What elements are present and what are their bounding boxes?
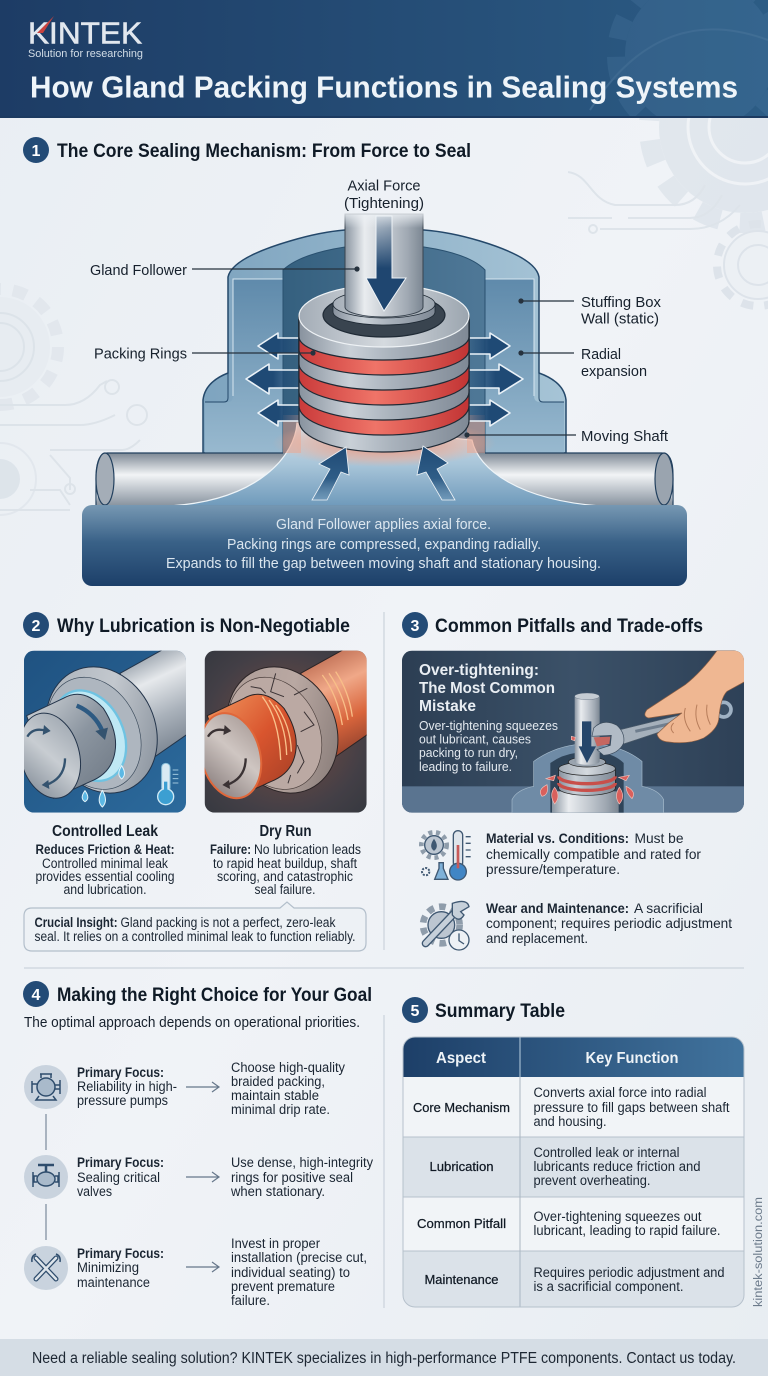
- label: Axial Force: (Tightening): [344, 195, 424, 212]
- card text: dry run: Dry Run: [260, 823, 312, 840]
- info band: Packing rings are compressed, expanding radially.: [227, 536, 541, 553]
- panel: over-tightening illustration: Over-tightening squeezes: [419, 719, 558, 733]
- section 5 heading: Summary Table: [435, 1001, 565, 1022]
- arrow: axial force: [366, 216, 406, 311]
- vertical website label: kintek-solution.com: [753, 1197, 765, 1307]
- card text: dry run: scoring, and catastrophic: [217, 869, 353, 884]
- panel: sealing mechanism diagram: [82, 178, 687, 586]
- row: core mechanism: and housing.: [534, 1114, 606, 1129]
- choice row: maintenance: Primary Focus:: [77, 1246, 164, 1261]
- card text: controlled leak: Reduces Friction & Heat:: [36, 842, 174, 857]
- choice row: maintenance: prevent premature: [231, 1279, 335, 1294]
- text: wear and maintenance: and replacement.: [486, 930, 588, 946]
- panel: over-tightening illustration: The Most Common: [419, 680, 555, 697]
- label: Radial expansion: expansion: [581, 363, 647, 380]
- label: Radial expansion: [518, 346, 647, 380]
- housing: stuffing box: [203, 230, 566, 453]
- section 3 heading: Common Pitfalls and Trade-offs: [435, 616, 703, 637]
- horizontal moving shaft: [96, 423, 673, 506]
- label: Stuffing Box Wall: [518, 294, 661, 328]
- row: core mechanism: Core Mechanism: [413, 1100, 510, 1115]
- label: Stuffing Box Wall: Stuffing Box: [581, 294, 661, 311]
- choice row: maintenance: Minimizing: [77, 1260, 139, 1275]
- info band: [82, 505, 687, 586]
- row: maintenance: [424, 1265, 724, 1294]
- card text: controlled leak: [36, 823, 174, 897]
- background decoration: gears and circuit lines: [0, 31, 768, 515]
- panel: dry run illustration: [204, 650, 367, 813]
- section 5 heading: 5: [411, 1003, 420, 1020]
- text: wear and maintenance: component; requires periodic adjustment: [486, 915, 732, 931]
- row: common pitfall: [417, 1209, 720, 1238]
- choice row: pumps: minimal drip rate.: [231, 1102, 330, 1117]
- panel: over-tightening illustration: [402, 651, 745, 813]
- summary table: Key Function: [586, 1050, 678, 1067]
- icon: material and temperature: [421, 831, 471, 880]
- text: wear and maintenance: Wear and Maintenance:: [486, 900, 629, 916]
- card text: dry run: Failure:: [210, 842, 251, 857]
- info band: Gland Follower applies axial force.: [276, 516, 491, 533]
- row: core mechanism: [413, 1085, 730, 1129]
- icon: pump: [24, 1065, 68, 1109]
- card text: controlled leak: and lubrication.: [64, 882, 146, 897]
- row: lubrication: Controlled leak or internal: [534, 1145, 680, 1160]
- panel: over-tightening illustration: leading to failure.: [419, 760, 512, 774]
- label: Stuffing Box Wall: Wall (static): [581, 310, 659, 328]
- text: material vs conditions: Must be: [634, 830, 684, 846]
- text: material vs conditions: pressure/temperature.: [486, 861, 620, 877]
- choice row: maintenance: maintenance: [77, 1275, 150, 1290]
- title: How Gland Packing Functions in Sealing Systems: [30, 70, 738, 104]
- label: Moving Shaft: Moving Shaft: [581, 428, 669, 445]
- choice row: pumps: pressure pumps: [77, 1093, 168, 1108]
- choice row: maintenance: failure.: [231, 1293, 270, 1308]
- text: material vs conditions: Material vs. Conditions:: [486, 830, 629, 846]
- label: Axial Force: Axial Force: [348, 178, 420, 194]
- section 2 heading: [23, 612, 350, 638]
- row: maintenance: Requires periodic adjustment and: [534, 1265, 724, 1280]
- summary table: Aspect: [436, 1050, 487, 1067]
- summary table: [403, 1037, 744, 1307]
- row: lubrication: prevent overheating.: [534, 1173, 650, 1188]
- text: material vs conditions: chemically compatible and rated for: [486, 846, 701, 862]
- label: Gland Follower: Gland Follower: [90, 262, 187, 279]
- choice row: pumps: Choose high-quality: [231, 1060, 345, 1075]
- icon: valve: [24, 1155, 68, 1199]
- choice row: maintenance: [24, 1236, 367, 1308]
- text: wear and maintenance: A sacrificial: [634, 900, 703, 916]
- card text: dry run: seal failure.: [254, 882, 316, 897]
- row: lubrication: [430, 1145, 700, 1188]
- card text: dry run: No lubrication leads: [254, 842, 361, 857]
- row: maintenance: Maintenance: [424, 1272, 498, 1287]
- label: Packing Rings: [94, 346, 316, 362]
- section 2 heading: 2: [32, 618, 41, 635]
- icon: crossed wrenches: [24, 1246, 68, 1290]
- row: common pitfall: Common Pitfall: [417, 1216, 506, 1231]
- choice row: valves: Primary Focus:: [77, 1155, 164, 1170]
- callout: crucial insight: Gland packing is not a perfect, zero-leak: [120, 915, 336, 930]
- label: Axial Force: [344, 178, 424, 212]
- choice row: pumps: Primary Focus:: [77, 1065, 164, 1080]
- section 4 heading: Making the Right Choice for Your Goal: [57, 985, 372, 1006]
- choice row: maintenance: Invest in proper: [231, 1236, 320, 1251]
- section 1 heading: 1: [32, 143, 41, 160]
- row: core mechanism: pressure to fill gaps between shaft: [534, 1100, 730, 1115]
- choice row: maintenance: installation (precise cut,: [231, 1250, 367, 1265]
- label: Moving Shaft: [464, 428, 669, 445]
- section 4 heading: [23, 981, 372, 1007]
- card text: controlled leak: provides essential cooling: [36, 869, 174, 884]
- callout: crucial insight: Crucial Insight:: [34, 915, 118, 930]
- section 5 heading: [402, 997, 565, 1023]
- row: maintenance: is a sacrificial component.: [534, 1279, 684, 1294]
- section 1 heading: The Core Sealing Mechanism: From Force to Seal: [57, 141, 471, 162]
- logo: KINTEK: Solution for researching: [28, 48, 143, 60]
- heat glow: [272, 415, 496, 467]
- logo: KINTEK: KINTEK: [28, 16, 142, 50]
- icon: wear and maintenance: [423, 901, 469, 950]
- label: Packing Rings: Packing Rings: [94, 346, 187, 362]
- choice row: valves: valves: [77, 1184, 112, 1199]
- card text: dry run: [210, 823, 361, 897]
- row: lubrication: Lubrication: [430, 1159, 494, 1174]
- panel: controlled leak illustration: [24, 650, 186, 813]
- callout: crucial insight: seal. It relies on a controlled minimal leak to function reliably.: [34, 929, 356, 944]
- section 3 heading: 3: [411, 618, 420, 635]
- row: common pitfall: Over-tightening squeezes out: [534, 1209, 702, 1224]
- row: core mechanism: Converts axial force into radial: [534, 1085, 706, 1100]
- gland follower rod: [344, 213, 424, 317]
- label: Radial expansion: Radial: [581, 346, 621, 363]
- choice row: pumps: maintain stable: [231, 1088, 319, 1103]
- callout: crucial insight: [24, 902, 366, 951]
- choice row: valves: Use dense, high-integrity: [231, 1155, 373, 1170]
- choice row: pumps: braided packing,: [231, 1074, 325, 1089]
- footer call to action: [0, 1339, 768, 1376]
- label: Gland Follower: [90, 262, 360, 279]
- choice row: maintenance: individual seating) to: [231, 1265, 350, 1280]
- text: wear and maintenance: [486, 900, 732, 946]
- choice row: valves: when stationary.: [230, 1184, 325, 1199]
- intro text: section 4: The optimal approach depends on operational priorities.: [24, 1015, 360, 1031]
- panel: over-tightening illustration: out lubricant, causes: [419, 732, 531, 746]
- card text: controlled leak: Controlled minimal leak: [42, 856, 168, 871]
- card text: controlled leak: Controlled Leak: [52, 823, 158, 840]
- text: material vs conditions: [486, 830, 701, 877]
- panel: over-tightening illustration: Mistake: [419, 698, 476, 715]
- choice row: valves: rings for positive seal: [231, 1170, 353, 1185]
- section 2 heading: Why Lubrication is Non-Negotiable: [57, 616, 350, 637]
- choice row: pumps: [24, 1060, 345, 1117]
- choice row: valves: [24, 1155, 373, 1199]
- arrows: radial expansion: [246, 333, 523, 426]
- arrows: upward shaft pressure: [312, 446, 455, 500]
- info band: Expands to fill the gap between moving shaft and stationary housing.: [166, 555, 601, 572]
- row: common pitfall: lubricant, leading to rapid failure.: [534, 1223, 720, 1238]
- row: lubrication: lubricants reduce friction and: [534, 1159, 700, 1174]
- panel: over-tightening illustration: packing to run dry,: [419, 746, 518, 760]
- choice row: valves: Sealing critical: [77, 1170, 160, 1185]
- packing ring stack: [299, 285, 469, 452]
- card text: dry run: to rapid heat buildup, shaft: [213, 856, 357, 871]
- choice row: pumps: Reliability in high-: [77, 1079, 177, 1094]
- section 3 heading: [402, 612, 703, 638]
- section 4 heading: 4: [32, 987, 41, 1004]
- panel: over-tightening illustration: Over-tightening:: [419, 662, 539, 679]
- header band: [0, 0, 768, 118]
